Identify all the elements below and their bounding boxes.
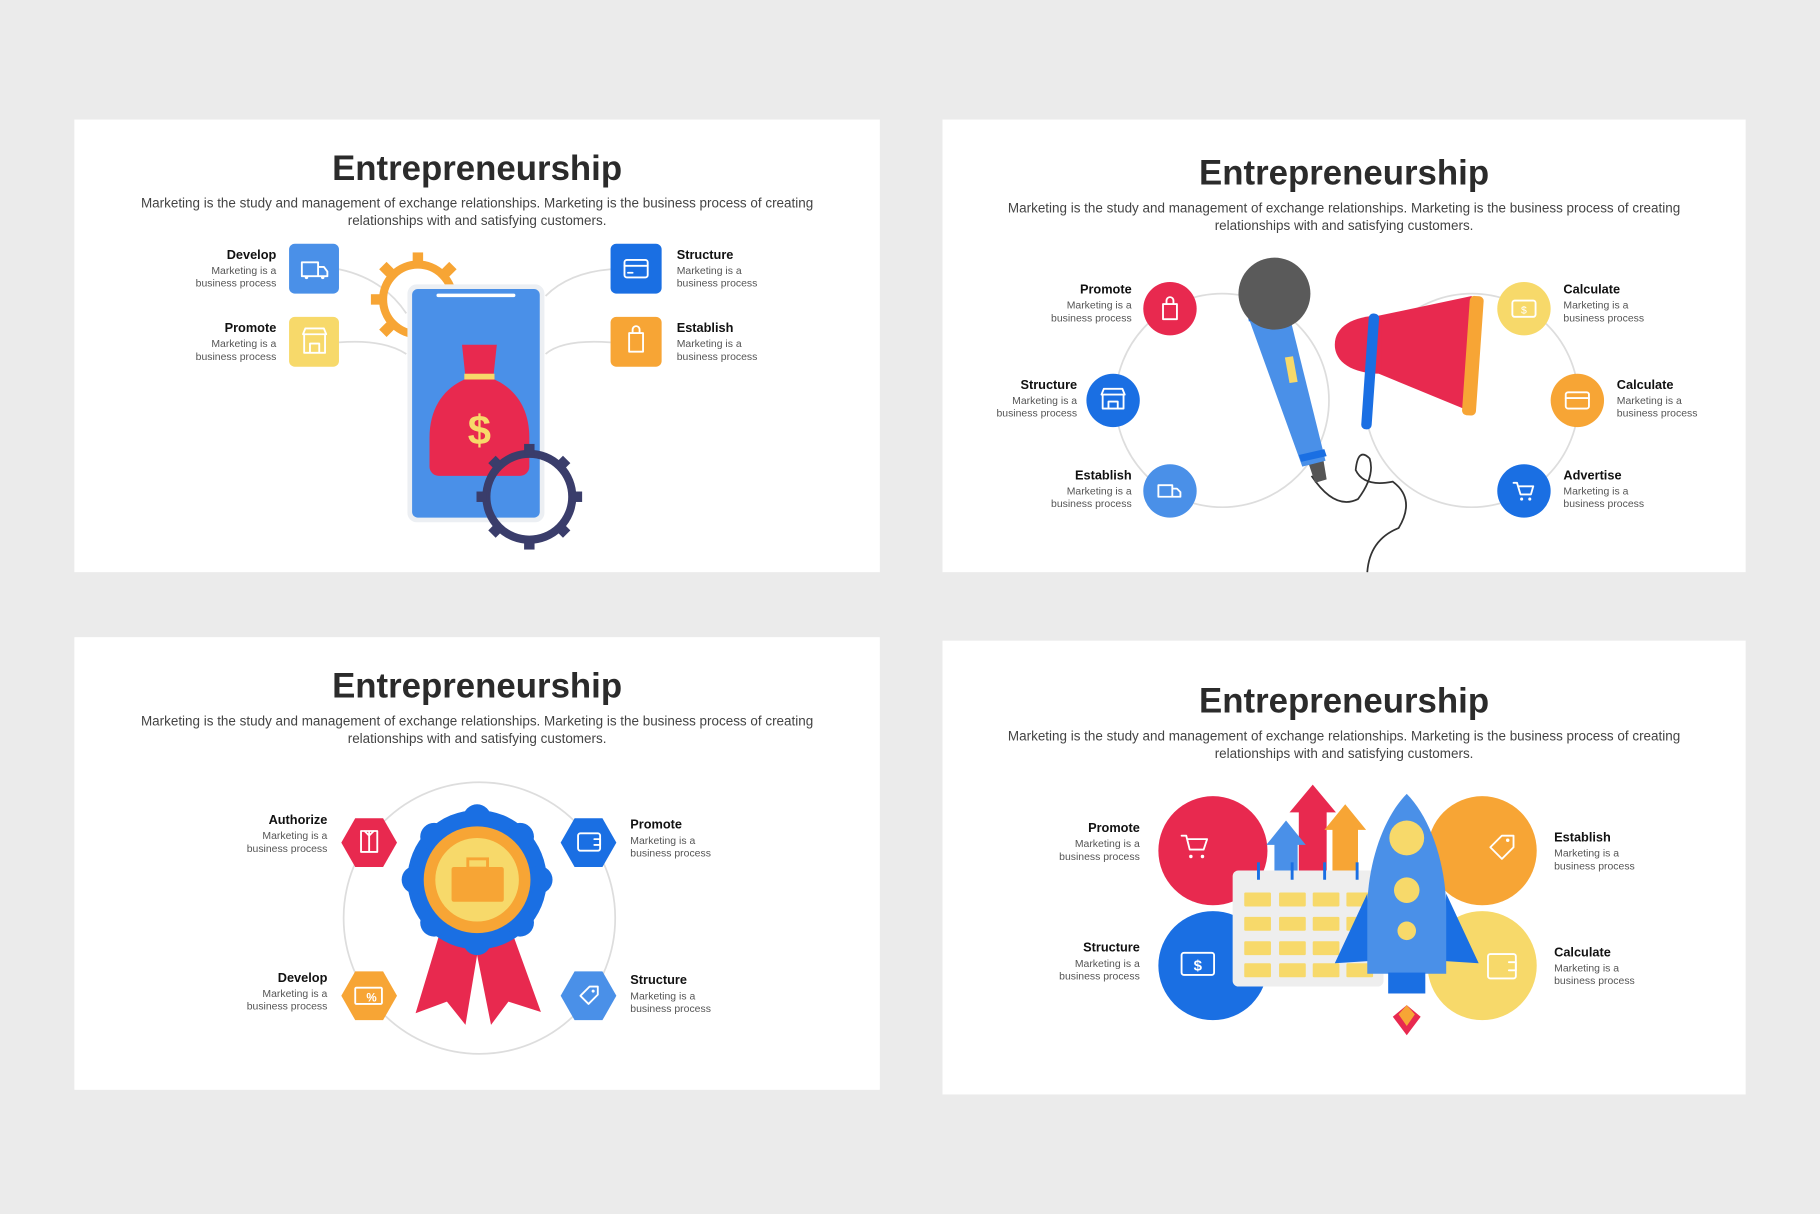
- circle: Calculate yellow: [1428, 911, 1537, 1020]
- icon: megaphone: [1335, 296, 1484, 430]
- label: Promote: Promote: [1088, 820, 1140, 835]
- subtitle text: Marketing is the study and management of exchange relationships. Marketing is the business process of creating: [141, 713, 813, 728]
- icon: calendar: [1233, 862, 1384, 987]
- panel: rocket calendar: [942, 641, 1746, 1094]
- item: Promote: Promote: [225, 320, 276, 335]
- item: Promote: Marketing is a: [630, 836, 695, 847]
- icon: rocket: [1335, 794, 1479, 1035]
- panel: phone money bag: [74, 120, 880, 572]
- item: Advertise: Advertise: [1563, 467, 1622, 482]
- item: Structure: business process: [630, 1004, 711, 1015]
- label: Promote: [1059, 820, 1140, 863]
- connector lines: [339, 269, 611, 354]
- item: Structure: [611, 244, 757, 294]
- item: Establish: Establish: [677, 320, 733, 335]
- item: Promote: business process: [630, 849, 711, 860]
- item: Advertise: [1497, 464, 1644, 518]
- item: Calculate (orange): Calculate: [1617, 377, 1674, 392]
- label: Structure: Structure: [1083, 940, 1140, 955]
- title: Entrepreneurship: [332, 149, 622, 188]
- item: Structure: Marketing is a: [1012, 396, 1077, 407]
- item: Develop: Develop: [227, 247, 277, 262]
- item: Calculate (yellow): Marketing is a: [1563, 301, 1629, 312]
- label: Structure: business process: [1059, 972, 1140, 983]
- item: Structure: business process: [996, 409, 1077, 420]
- item: Establish: [1051, 464, 1197, 518]
- item: Promote: business process: [196, 352, 276, 363]
- label: Establish: business process: [1554, 861, 1635, 872]
- ring outline: [344, 782, 615, 1054]
- item: Develop: business process: [196, 279, 276, 290]
- circle: Structure blue: [1158, 911, 1267, 1020]
- label: Establish: Marketing is a: [1554, 849, 1619, 860]
- subtitle text: Marketing is the study and management of exchange relationships. Marketing is the business process of creating: [141, 196, 813, 211]
- icons in circles: $: [1194, 957, 1203, 974]
- ring outlines: [1115, 294, 1579, 507]
- label: Calculate: business process: [1554, 976, 1635, 987]
- circle: Promote red: [1158, 796, 1267, 905]
- title: Entrepreneurship: [1199, 154, 1489, 193]
- subtitle text: Marketing is the study and management of exchange relationships. Marketing is the business process of creating: [1008, 728, 1680, 743]
- panel: award badge: [74, 637, 880, 1090]
- item: Advertise: Marketing is a: [1563, 486, 1629, 497]
- item: Calculate (yellow): business process: [1563, 313, 1644, 324]
- item: Promote: Marketing is a: [211, 339, 276, 350]
- subtitle text: Marketing is the study and management of exchange relationships. Marketing is the business process of creating: [1008, 200, 1680, 215]
- icon: phone: [407, 284, 544, 522]
- item: Develop: business process: [247, 1002, 327, 1013]
- item: Promote: [196, 317, 339, 367]
- icon: growth arrows: [1266, 785, 1366, 882]
- item: Authorize: Marketing is a: [262, 831, 328, 842]
- circle: Establish orange: [1428, 796, 1537, 905]
- label: Establish: [1554, 829, 1635, 872]
- label: Calculate: Marketing is a: [1554, 963, 1619, 974]
- label: Promote: Marketing is a: [1075, 839, 1140, 850]
- item: Establish: business process: [1051, 499, 1132, 510]
- item: Structure: [561, 971, 711, 1020]
- label: Structure: Marketing is a: [1075, 959, 1140, 970]
- item: Structure: Marketing is a: [677, 266, 742, 277]
- item: Structure: Structure: [1020, 377, 1077, 392]
- subtitle text: relationships with and satisfying customers.: [348, 213, 606, 228]
- item: Calculate (orange): Marketing is a: [1617, 396, 1682, 407]
- label: Promote: business process: [1059, 852, 1140, 863]
- item: Establish: Establish: [1075, 467, 1132, 482]
- label: Calculate: [1554, 944, 1635, 987]
- item: Calculate (yellow): [1497, 282, 1644, 335]
- item: Authorize: [247, 812, 397, 867]
- item: Promote: [561, 817, 711, 867]
- icon: microphone with cable: [1238, 258, 1406, 572]
- item: Establish: Marketing is a: [1067, 486, 1132, 497]
- item: Develop: [247, 970, 397, 1020]
- icon: award ribbon: [402, 804, 553, 1025]
- item: Promote: [1051, 282, 1197, 335]
- subtitle text: relationships with and satisfying customers.: [1215, 218, 1473, 233]
- item: Promote: Promote: [630, 817, 682, 832]
- icon: money bag: [430, 345, 529, 476]
- icon: money bag: $: [468, 407, 491, 454]
- item: Authorize: Authorize: [269, 812, 327, 827]
- panel: microphone megaphone: [942, 120, 1746, 572]
- item: Calculate (orange): [1551, 374, 1697, 427]
- item: Structure: business process: [677, 279, 757, 290]
- item: Calculate (yellow): $: [1521, 305, 1527, 316]
- item: Develop: Marketing is a: [211, 266, 276, 277]
- label: Establish: Establish: [1554, 829, 1611, 844]
- item: Structure: [996, 374, 1140, 427]
- item: Establish: business process: [677, 352, 757, 363]
- item: Develop: %: [366, 992, 377, 1005]
- item: Structure: Structure: [630, 972, 687, 987]
- icon: orange gear: [371, 253, 456, 346]
- item: Develop: [196, 244, 339, 294]
- item: Establish: Marketing is a: [677, 339, 742, 350]
- item: Calculate (orange): business process: [1617, 409, 1697, 420]
- item: Promote: business process: [1051, 313, 1132, 324]
- item: Calculate (yellow): Calculate: [1563, 282, 1620, 297]
- title: Entrepreneurship: [1199, 682, 1489, 721]
- item: Structure: Structure: [677, 247, 733, 262]
- item: Promote: Promote: [1080, 282, 1132, 297]
- icon: navy gear: [477, 445, 582, 549]
- subtitle text: relationships with and satisfying customers.: [348, 731, 606, 746]
- item: Advertise: business process: [1563, 499, 1644, 510]
- item: Develop: Develop: [278, 970, 328, 985]
- item: Structure: Marketing is a: [630, 991, 695, 1002]
- title: Entrepreneurship: [332, 667, 622, 706]
- label: Calculate: Calculate: [1554, 944, 1611, 959]
- label: Structure: [1059, 940, 1140, 983]
- item: Authorize: business process: [247, 844, 327, 855]
- item: Promote: Marketing is a: [1067, 301, 1132, 312]
- subtitle text: relationships with and satisfying customers.: [1215, 746, 1473, 761]
- icons in circles: [1182, 836, 1516, 978]
- item: Develop: Marketing is a: [262, 989, 328, 1000]
- item: Establish: [611, 317, 757, 367]
